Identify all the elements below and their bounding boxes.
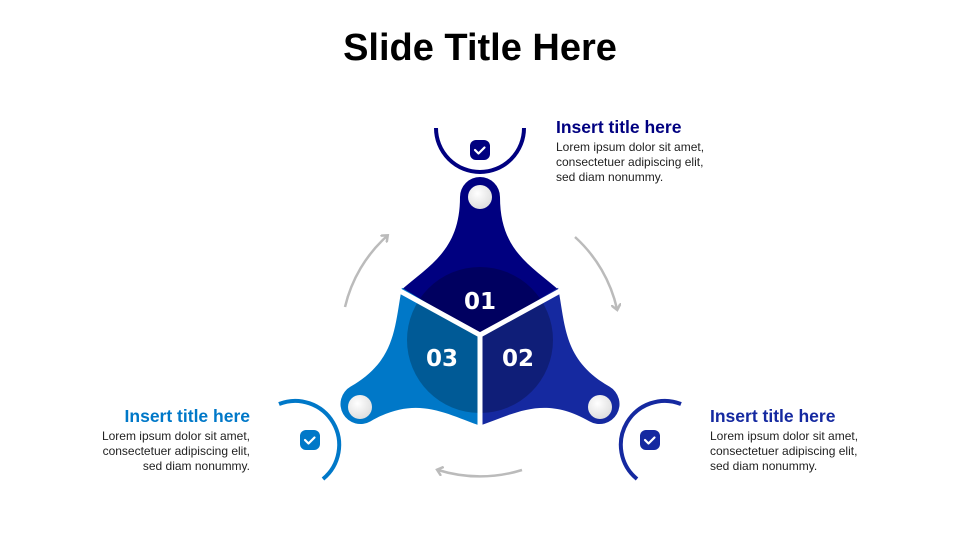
text: top right: consectetuer adipiscing elit, (556, 155, 703, 169)
text: left: consectetuer adipiscing elit, (103, 444, 250, 458)
text: top right: Insert title here (556, 117, 681, 137)
check icons (300, 140, 660, 450)
lobe 01 (400, 177, 560, 335)
text: right: Lorem ipsum dolor sit amet, (710, 429, 858, 443)
knobs (348, 185, 612, 419)
lobe 02 (440, 266, 657, 483)
text: left: Lorem ipsum dolor sit amet, (102, 429, 250, 443)
text: top right: Lorem ipsum dolor sit amet, (556, 140, 704, 154)
lobe 03 (303, 266, 520, 483)
title: Slide Title Here (343, 27, 617, 69)
text: left: Insert title here (125, 406, 250, 426)
text: right: consectetuer adipiscing elit, (710, 444, 857, 458)
text: right: Insert title here (710, 406, 835, 426)
outer arcs (279, 128, 681, 479)
inner circle (407, 267, 553, 413)
text: top right (556, 117, 704, 184)
numbers: 01 (464, 289, 496, 315)
numbers (426, 289, 534, 372)
text: left (102, 406, 250, 473)
text: left: sed diam nonummy. (143, 459, 250, 473)
numbers: 03 (426, 346, 458, 372)
text: right (710, 406, 858, 473)
text: right: sed diam nonummy. (710, 459, 817, 473)
numbers: 02 (502, 346, 534, 372)
arrows (345, 236, 617, 476)
text: top right: sed diam nonummy. (556, 170, 663, 184)
